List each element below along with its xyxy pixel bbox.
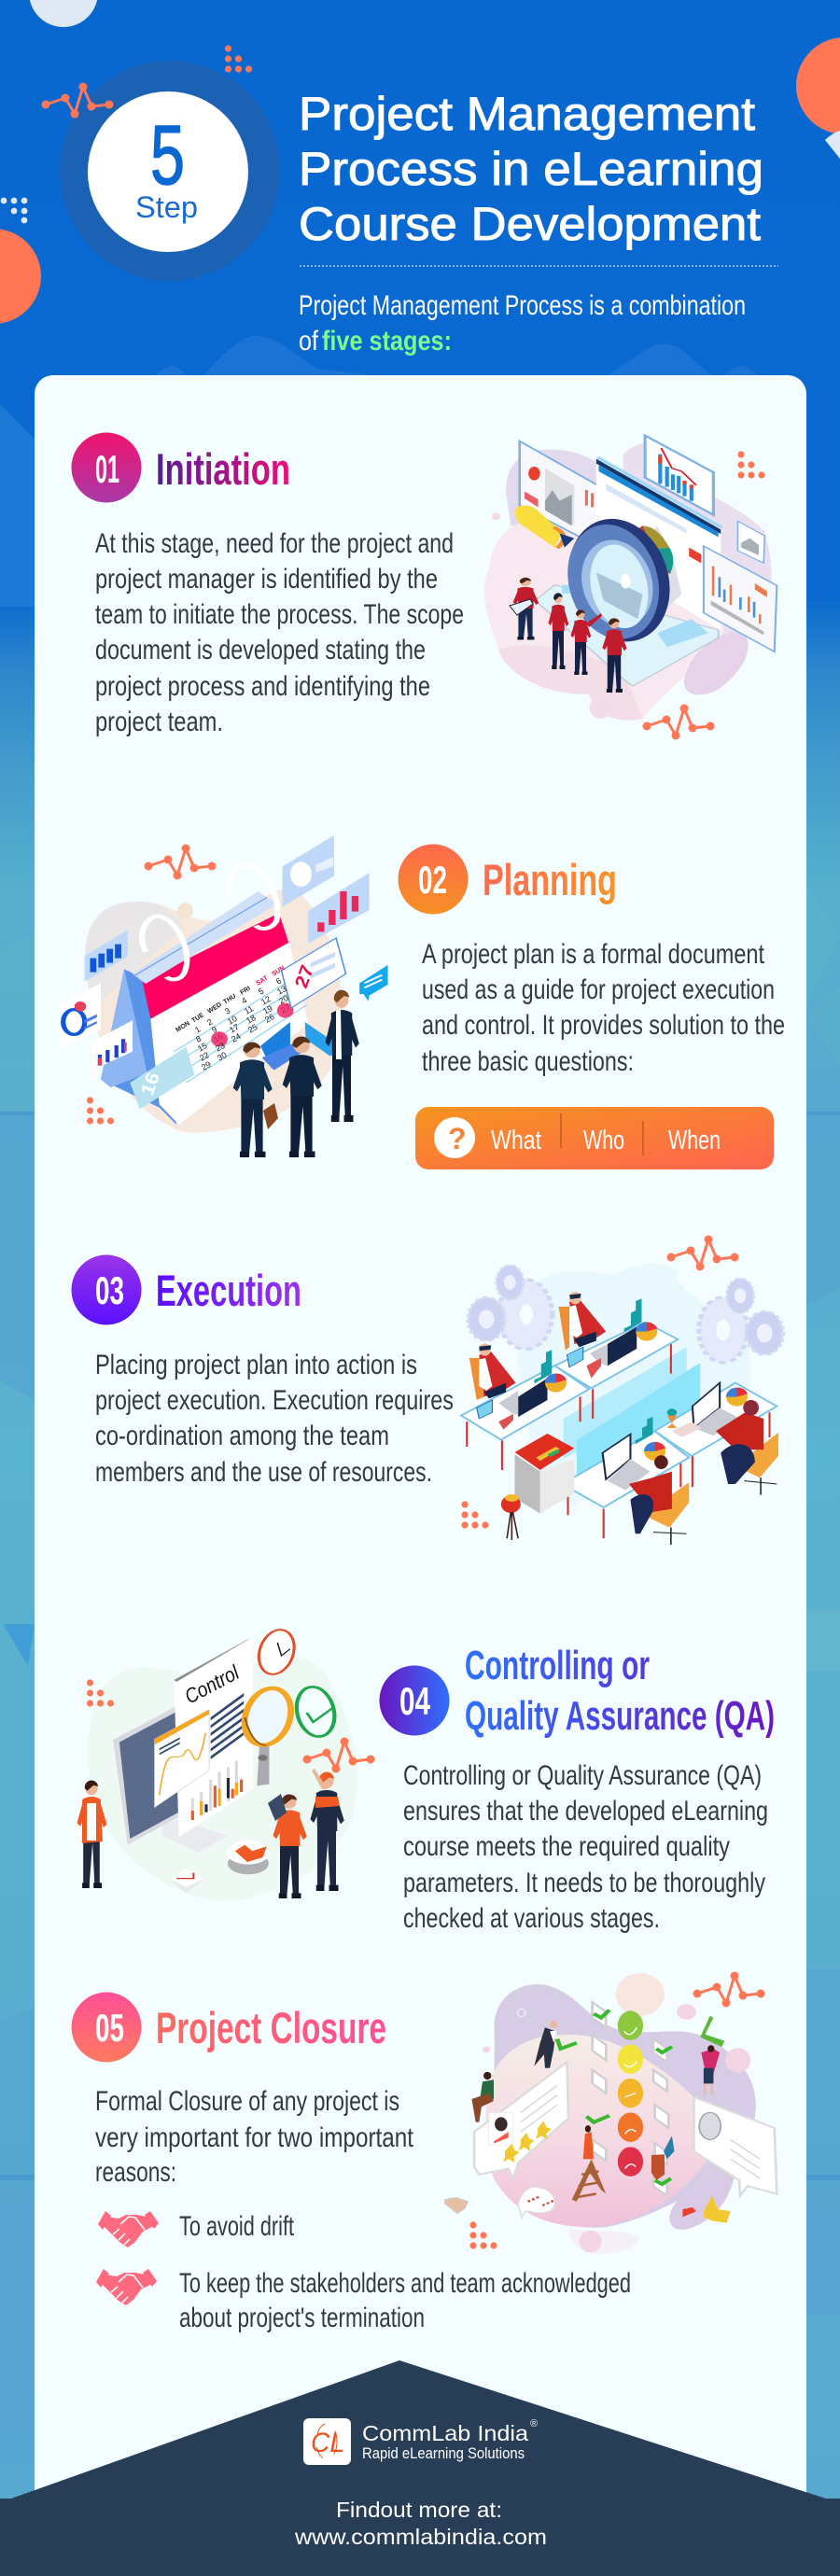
body text 05: very important for two important xyxy=(95,2122,414,2153)
calendar dates: 9 xyxy=(210,1025,218,1035)
body text 04 xyxy=(403,1760,768,1934)
calendar dates: 26 xyxy=(263,1012,276,1025)
badge: 5 Step: Step xyxy=(135,190,198,224)
logo: ® xyxy=(530,2418,538,2429)
icon: handshake xyxy=(96,2269,157,2305)
reason 1: To avoid drift xyxy=(179,2211,294,2242)
title: Process in eLearning xyxy=(299,143,763,195)
body text 03 xyxy=(95,1350,454,1488)
calendar dates: WED xyxy=(206,1001,223,1015)
calendar dates: 16 xyxy=(212,1031,225,1044)
badge: 5 Step: 5 xyxy=(150,109,185,203)
section 04: Controlling or Quality Assurance xyxy=(77,1629,775,1934)
title: Project Management xyxy=(299,88,755,140)
number badge 04: 04 xyxy=(399,1679,430,1723)
calendar dates: 30 xyxy=(216,1050,229,1063)
illustration: office desks xyxy=(461,1236,783,1545)
calendar dates: 17 xyxy=(228,1022,241,1035)
calendar dates: THU xyxy=(222,993,237,1006)
find out more: www.commlabindia.com xyxy=(294,2525,547,2549)
body text 02 xyxy=(422,939,785,1077)
calendar dates: MON xyxy=(175,1020,191,1034)
body text 04: course meets the required quality xyxy=(403,1831,730,1862)
calendar dates: SAT xyxy=(255,974,270,987)
heading: Initiation: Initiation xyxy=(156,444,290,494)
calendar dates: 27 xyxy=(279,1002,292,1015)
header decorations xyxy=(0,0,840,375)
heading: Project Closure: Project Closure xyxy=(156,2003,386,2052)
section 05: Project Closure xyxy=(71,1971,777,2333)
card numbers: 16 xyxy=(137,1070,164,1099)
card numbers xyxy=(137,962,318,1099)
main white panel xyxy=(35,375,806,2522)
questions pill: What xyxy=(491,1126,541,1155)
logo: CommLab India xyxy=(362,2421,528,2445)
card numbers: 27 xyxy=(291,962,318,991)
calendar dates: 13 xyxy=(275,984,288,997)
heading: Execution: Execution xyxy=(156,1266,301,1315)
body text 03: members and the use of resources. xyxy=(95,1457,432,1488)
questions pill: Who xyxy=(583,1126,624,1155)
reason 2 xyxy=(96,2268,631,2333)
number badge 02: 02 xyxy=(418,858,447,902)
body text 03: project execution. Execution requires xyxy=(95,1385,454,1416)
section 02: Planning xyxy=(60,835,785,1169)
number badge 01 xyxy=(71,433,142,502)
calendar dates: 8 xyxy=(194,1034,203,1044)
number badge 01: 01 xyxy=(95,447,119,491)
number badge 03 xyxy=(71,1254,142,1325)
number badge 02 xyxy=(398,844,469,915)
calendar dates: 20 xyxy=(277,993,290,1006)
illustration: magnifier over laptop xyxy=(484,436,777,739)
icon: question mark xyxy=(434,1117,475,1158)
illustration: calendar with team xyxy=(60,835,388,1157)
body text 03: co-ordination among the team xyxy=(95,1421,389,1451)
calendar dates: 29 xyxy=(200,1059,213,1072)
body text 01: project manager is identified by the xyxy=(95,564,438,595)
icon: question mark: ? xyxy=(448,1122,467,1155)
calendar dates: FRI xyxy=(239,986,252,997)
body text 01: project team. xyxy=(95,707,223,737)
illustration: control monitor xyxy=(77,1629,374,1901)
title xyxy=(299,88,763,250)
find out more: Findout more at: xyxy=(336,2498,502,2522)
intro text: five stages: xyxy=(322,326,452,357)
title: Course Development xyxy=(299,198,761,250)
calendar dates: TUE xyxy=(190,1012,205,1025)
body text 05: Formal Closure of any project is xyxy=(95,2086,399,2117)
number badge 05: 05 xyxy=(95,2006,124,2050)
section 01: Initiation xyxy=(71,433,777,739)
body text 03: Placing project plan into action is xyxy=(95,1350,417,1380)
calendar dates: SUN xyxy=(271,965,287,978)
reason 1 xyxy=(98,2211,294,2247)
body text 01: At this stage, need for the project and xyxy=(95,528,454,559)
body text 01: document is developed stating the xyxy=(95,635,426,665)
illustration: feedback smileys xyxy=(445,1971,777,2254)
badge: 5 Step xyxy=(41,61,280,281)
number badge 05 xyxy=(71,1992,142,2063)
body text 01 xyxy=(95,528,464,737)
body text 01: project process and identifying the xyxy=(95,671,430,702)
icon: handshake xyxy=(98,2211,159,2247)
calendar dates: 3 xyxy=(223,1006,231,1016)
heading: Controlling or Quality Assurance (QA): Controlling or xyxy=(465,1643,650,1688)
body text 01: team to initiate the process. The scope xyxy=(95,599,464,630)
questions pill: When xyxy=(668,1126,721,1155)
questions pill xyxy=(415,1107,774,1169)
intro text xyxy=(299,266,778,357)
number badge 04 xyxy=(379,1665,450,1736)
body text 04: checked at various stages. xyxy=(403,1903,660,1934)
number badge 03: 03 xyxy=(95,1268,124,1312)
control label: Control xyxy=(181,1660,244,1708)
calendar dates: 25 xyxy=(246,1022,259,1035)
logo: Rapid eLearning Solutions xyxy=(362,2444,525,2462)
calendar dates: 18 xyxy=(245,1013,258,1026)
reason 2: To keep the stakeholders and team acknowledged xyxy=(179,2268,631,2299)
calendar dates: 11 xyxy=(243,1003,255,1016)
find out more xyxy=(294,2498,547,2549)
calendar dates: 19 xyxy=(261,1003,274,1016)
calendar dates: 5 xyxy=(257,987,265,997)
calendar dates: 1 xyxy=(193,1025,202,1035)
calendar dates: 12 xyxy=(259,994,273,1007)
body text 05: reasons: xyxy=(95,2157,176,2188)
heading: Controlling or Quality Assurance (QA) xyxy=(465,1643,775,1739)
calendar dates: 23 xyxy=(214,1041,227,1054)
calendar dates: 6 xyxy=(274,976,283,987)
calendar dates: 2 xyxy=(205,1017,214,1028)
heading: Planning: Planning xyxy=(483,855,617,904)
section 03: Execution xyxy=(71,1236,783,1545)
reason 2: about project's termination xyxy=(179,2303,425,2333)
logo: CL xyxy=(311,2428,344,2458)
calendar dates: 22 xyxy=(198,1050,211,1063)
calendar dates: 10 xyxy=(226,1014,239,1027)
footer band xyxy=(0,2360,840,2576)
calendar dates xyxy=(175,965,292,1072)
calendar dates: 4 xyxy=(240,996,248,1006)
intro text: of xyxy=(299,326,319,357)
body text 05 xyxy=(95,2086,414,2188)
calendar dates: 15 xyxy=(196,1041,209,1054)
calendar dates: 24 xyxy=(230,1031,243,1044)
logo xyxy=(303,2418,538,2465)
body text 02: three basic questions: xyxy=(422,1046,634,1077)
